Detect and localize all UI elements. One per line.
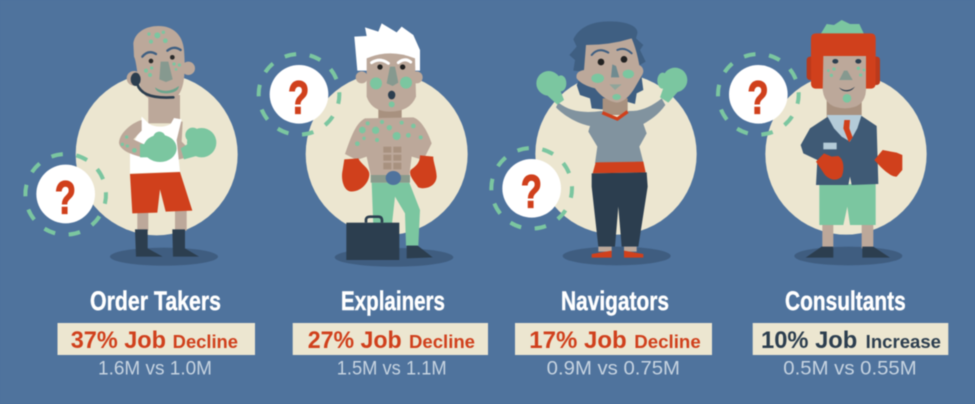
red collar [602,112,628,119]
legs and shoes [806,225,890,258]
neck [827,100,862,120]
heading: Consultants [785,286,906,316]
percent text: 27% Job [308,327,402,354]
question badge [489,146,574,231]
question badge: ? [521,165,542,217]
briefcase [346,217,399,260]
green mittens [536,68,687,105]
decline bar [515,323,712,355]
percent text: 10% Job [761,327,857,354]
values: 0.9M vs 0.75M [547,358,680,380]
ground shadow [794,247,902,265]
backdrop circle [535,73,697,235]
ankles and red shoes [592,247,643,258]
question badge [23,152,108,237]
red gloves [816,150,902,180]
red headguard [807,33,880,89]
heading: Order Takers [90,286,221,316]
decline word: Decline [634,332,701,352]
ground shadow [110,248,218,266]
legs and boots [135,210,199,257]
name badge [823,143,837,149]
red shorts [130,172,192,213]
heading: Explainers [341,286,445,316]
question badge: ? [55,171,76,223]
bare torso and arms [345,117,432,175]
face [576,38,643,103]
white hair [354,23,420,71]
head [356,53,423,122]
head [127,26,195,101]
figure: consultant [716,20,927,265]
figure: explainer [257,23,468,267]
forearm [174,122,190,160]
shirt collar [827,115,862,142]
decline bar [293,323,488,355]
green shorts [819,184,876,225]
decline word: Decline [173,332,238,352]
belt and buckle [371,171,410,185]
dark trousers [592,172,648,247]
percent text: 37% Job [71,327,166,354]
ground shadow [563,247,671,265]
neck [148,95,180,123]
percent text: 17% Job [529,327,627,354]
question badge: ? [747,72,768,124]
green trousers [372,183,420,246]
green gloves [140,128,216,162]
values: 1.6M vs 1.0M [98,358,212,380]
hair [569,21,646,109]
suit jacket [801,116,878,185]
decline word: Decline [409,332,475,352]
figure: order taker [23,26,238,266]
neck [603,98,628,115]
white tank top [130,117,182,173]
grey sweater and arms [556,98,665,163]
decline bar [58,323,255,355]
red gloves [342,155,437,191]
column labels: consultants [753,286,948,380]
backdrop circle [306,73,468,235]
shoe [407,246,433,258]
heading: Navigators [561,286,669,316]
column labels: explainers [293,286,488,380]
chest spots [355,120,423,146]
arm freckles [121,135,137,153]
headset [131,73,173,98]
backdrop circle [765,73,927,235]
column labels: navigators [515,286,712,380]
backdrop circle [76,73,238,235]
question badge [716,52,801,137]
red tie [843,120,853,142]
question badge [257,52,341,137]
question badge: ? [288,72,309,124]
column labels: order takers [58,286,255,380]
arm [119,120,143,157]
abs [383,147,401,169]
ground shadow [335,248,453,267]
green hair [821,20,864,34]
red waistband [593,162,646,173]
values: 0.5M vs 0.55M [783,358,917,380]
values: 1.5M vs 1.1M [337,358,447,380]
increase word: Increase [866,332,941,352]
figure: navigator [489,21,697,265]
face [823,56,866,108]
increase bar [753,323,948,355]
